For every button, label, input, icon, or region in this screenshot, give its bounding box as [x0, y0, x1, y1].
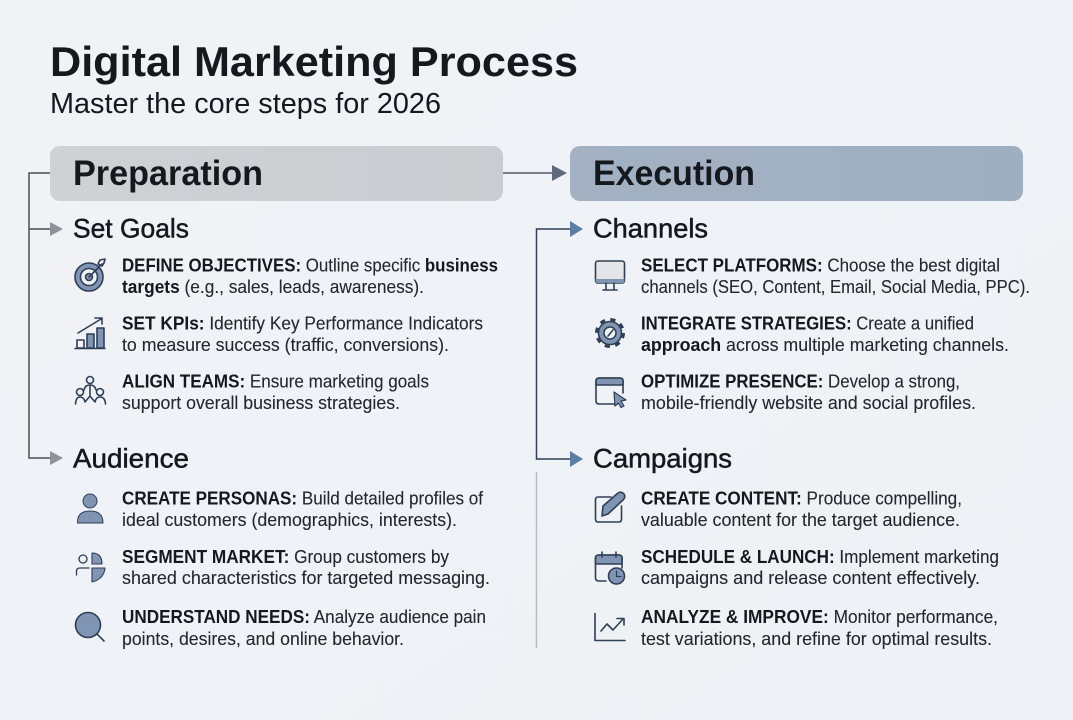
text: select platforms: SELECT PLATFORMS: Choose the best digital [641, 256, 1000, 276]
heading: set goals: Set Goals [73, 214, 189, 244]
icon: person [77, 494, 103, 523]
text: segment market [122, 547, 490, 588]
text: integrate strategies [641, 314, 1009, 355]
icon: target [75, 259, 105, 291]
text: set kpis: to measure success (traffic, conversions). [122, 335, 449, 355]
text: define objectives: targets (e.g., sales, leads, awareness). [122, 277, 424, 297]
text: create personas: ideal customers (demographics, interests). [122, 510, 457, 530]
text: analyze and improve: ANALYZE & IMPROVE: Monitor performance, [641, 607, 998, 627]
panel: audience [73, 444, 490, 649]
icon: line chart [595, 614, 625, 640]
subtitle: Master the core steps for 2026 [50, 88, 441, 120]
text: create personas: CREATE PERSONAS: Build detailed profiles of [122, 488, 484, 508]
text: optimize presence: OPTIMIZE PRESENCE: Develop a strong, [641, 372, 960, 392]
text: set kpis: SET KPIs: Identify Key Performance Indicators [122, 314, 483, 334]
text: schedule and launch: campaigns and release content effectively. [641, 568, 980, 588]
title: Digital Marketing Process [50, 38, 578, 85]
text: integrate strategies: INTEGRATE STRATEGIES: Create a unified [641, 314, 974, 334]
text: schedule and launch [641, 547, 999, 588]
text: define objectives [122, 256, 498, 297]
text: understand needs: UNDERSTAND NEEDS: Analyze audience pain [122, 607, 486, 627]
icon: team [76, 376, 106, 404]
text: optimize presence [641, 372, 976, 413]
text: select platforms: channels (SEO, Content, Email, Social Media, PPC). [641, 277, 1030, 297]
arrow: preparation to set goals and audience [29, 173, 63, 465]
text: create personas [122, 488, 484, 530]
heading: audience: Audience [73, 444, 189, 474]
text: segment market: SEGMENT MARKET: Group customers by [122, 547, 449, 567]
icon: growth bars [75, 318, 105, 348]
text: optimize presence: mobile-friendly website and social profiles. [641, 393, 976, 413]
text: integrate strategies: approach across multiple marketing channels. [641, 335, 1009, 355]
panel: execution header [570, 146, 1023, 201]
arrow: execution to channels and campaigns [536, 221, 583, 467]
panel: preparation header: Preparation [73, 154, 263, 193]
icon: magnifier [76, 612, 104, 641]
panel: execution header: Execution [593, 154, 755, 193]
heading: channels: Channels [593, 214, 708, 244]
icon: browser window [596, 378, 626, 408]
text: create content [641, 488, 962, 530]
text: align teams: ALIGN TEAMS: Ensure marketing goals [122, 372, 429, 392]
panel: preparation header [50, 146, 503, 201]
panel: campaigns [593, 444, 999, 649]
arrow: preparation to execution [503, 165, 567, 181]
text: create content: valuable content for the target audience. [641, 510, 960, 530]
text: set kpis [122, 314, 483, 355]
panel: set goals [73, 214, 498, 413]
text: create content: CREATE CONTENT: Produce compelling, [641, 488, 962, 508]
text: analyze and improve [641, 607, 998, 649]
text: select platforms [641, 256, 1030, 297]
icon: monitor [596, 261, 624, 290]
text: align teams [122, 372, 429, 413]
icon: segments [76, 553, 105, 582]
text: analyze and improve: test variations, and refine for optimal results. [641, 629, 992, 649]
text: align teams: support overall business strategies. [122, 393, 400, 413]
text: segment market: shared characteristics for targeted messaging. [122, 568, 490, 588]
heading: campaigns: Campaigns [593, 444, 732, 474]
panel: channels [593, 214, 1030, 413]
text: define objectives: DEFINE OBJECTIVES: Outline specific business [122, 256, 498, 276]
text: schedule and launch: SCHEDULE & LAUNCH: Implement marketing [641, 547, 999, 567]
text: understand needs: points, desires, and online behavior. [122, 629, 404, 649]
icon: pencil and pad [596, 492, 625, 522]
icon: calendar and clock [596, 552, 624, 584]
text: understand needs [122, 607, 486, 649]
icon: gear [597, 320, 623, 346]
